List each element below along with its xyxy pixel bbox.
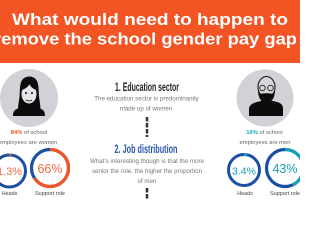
men share text: 16% of school: [246, 130, 283, 136]
chart: women heads ring: [0, 155, 26, 197]
job distribution text: of men: [138, 178, 157, 185]
women share text: [0, 130, 57, 146]
education text: made up of women: [120, 106, 173, 112]
icon: woman avatar: [0, 69, 58, 127]
chart: women support role ring: Support role: [35, 191, 65, 197]
chart: women heads ring: Heads: [2, 191, 18, 197]
job distribution text: [90, 158, 205, 185]
chart: men support role ring: [266, 150, 304, 197]
men share text: [240, 130, 290, 146]
education text: [94, 96, 200, 112]
panel: men: [228, 70, 304, 197]
men share text: employees are men: [240, 140, 290, 146]
panel: women: [0, 69, 68, 197]
panel: sector text: [90, 82, 205, 200]
title: What would need to happen to: [12, 11, 288, 29]
chart: men support role ring: Support role: [270, 191, 300, 197]
chart: men support role ring: 43%: [272, 162, 298, 176]
chart: men heads ring: Heads: [237, 191, 253, 197]
title: [0, 11, 297, 48]
icon: man avatar: [236, 70, 294, 126]
title: remove the school gender pay gap: [0, 30, 297, 48]
women share text: employees are women: [0, 140, 57, 146]
job distribution text: What's interesting though is that the more: [90, 158, 205, 165]
heading: job distribution: 2. Job distribution: [114, 144, 178, 156]
chart: women support role ring: 66%: [37, 162, 63, 176]
job distribution text: senior the role, the higher the proportion: [92, 168, 203, 175]
heading: education sector: 1. Education sector: [115, 82, 179, 94]
chart: women support role ring: [32, 150, 68, 197]
header banner: [0, 0, 300, 63]
chart: men heads ring: [228, 154, 260, 197]
education text: The education sector is predominantly: [94, 96, 200, 102]
dashed connector: [146, 188, 148, 200]
chart: men heads ring: 3.4%: [232, 166, 256, 178]
dashed connector: [146, 117, 148, 137]
infographic canvas: [0, 0, 300, 198]
women share text: 84% of school: [11, 130, 47, 136]
